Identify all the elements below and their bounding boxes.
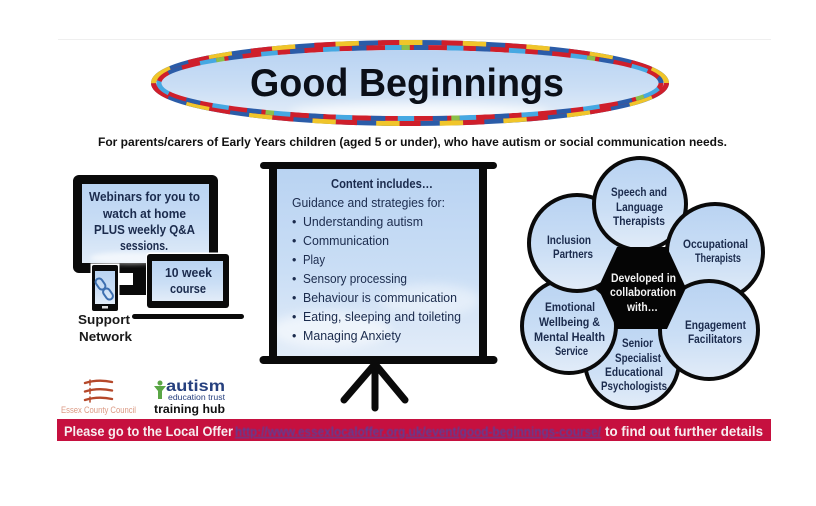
subtitle: For parents/carers of Early Years children (aged 5 or under), who have autism or social communication needs.	[98, 135, 727, 149]
centre hexagon: Developed in	[611, 273, 676, 285]
panel: content projector screen	[264, 165, 494, 408]
icon: monitor	[73, 175, 218, 295]
petal: occupational therapists: Therapists	[695, 253, 741, 265]
logo: autism education trust training hub: autism	[166, 378, 225, 395]
laptop text: 10 week	[165, 266, 212, 280]
bullet list: Play	[303, 253, 326, 267]
petal: emotional wellbeing and mental health service: Service	[555, 346, 588, 358]
petal: speech and language therapists: Speech and	[611, 187, 667, 199]
support network label: Support	[78, 312, 131, 327]
bullet list: •	[292, 310, 296, 324]
petal: occupational therapists	[667, 204, 763, 300]
centre hexagon: with…	[626, 302, 658, 314]
petal: speech and language therapists: Therapists	[613, 216, 665, 228]
footer banner: Please go to the Local Offer	[64, 424, 234, 439]
title text: Good Beginnings	[250, 62, 564, 105]
laptop text: course	[170, 282, 206, 296]
monitor text: watch at home	[102, 207, 186, 221]
petal: speech and language therapists: Language	[616, 202, 663, 214]
bullet list: •	[292, 329, 296, 343]
logo: Essex County Council: Essex County Council	[61, 405, 136, 415]
screen	[277, 169, 479, 356]
footer banner	[57, 419, 771, 441]
monitor text: Webinars for you to	[89, 190, 200, 204]
bullet list: •	[292, 272, 296, 286]
bullet list: Communication	[303, 234, 389, 248]
petal: speech and language therapists	[594, 158, 686, 250]
petal: engagement facilitators: Facilitators	[688, 334, 742, 346]
bullet list: Eating, sleeping and toileting	[303, 310, 461, 324]
monitor text: PLUS weekly Q&A	[94, 223, 195, 237]
icon: green figure	[154, 380, 166, 399]
petal: inclusion partners: Inclusion	[547, 235, 591, 247]
content text: Content includes…	[331, 177, 433, 191]
laptop text	[165, 266, 212, 296]
icon: chain link	[94, 277, 114, 301]
logo: Essex County Council	[61, 380, 136, 415]
puzzle ring border	[154, 42, 666, 124]
petal: senior specialist educational psychologists: Senior	[622, 338, 653, 350]
petal: senior specialist educational psychologists: Psychologists	[601, 381, 667, 393]
petal: emotional wellbeing and mental health service: Emotional	[545, 302, 595, 314]
petal: emotional wellbeing and mental health service	[522, 279, 616, 373]
icon: phone	[90, 264, 120, 312]
bullet list: Understanding autism	[303, 215, 423, 229]
petal: inclusion partners	[529, 195, 625, 291]
logo: autism education trust training hub	[154, 378, 226, 416]
logo: autism education trust training hub: education trust	[168, 393, 226, 402]
content text: Guidance and strategies for:	[292, 196, 445, 210]
content text	[292, 177, 461, 343]
bullet list	[292, 215, 461, 343]
centre hexagon	[598, 247, 686, 329]
bullet list: •	[292, 253, 296, 267]
panel: devices	[73, 175, 244, 344]
petal: inclusion partners: Partners	[553, 249, 593, 261]
projector frame	[264, 165, 494, 408]
bullet list: Sensory processing	[303, 272, 407, 286]
petal: engagement facilitators: Engagement	[685, 320, 746, 332]
logo: autism education trust training hub: training hub	[154, 404, 225, 416]
footer banner: to find out further details	[605, 424, 763, 439]
support network label: Network	[79, 329, 133, 344]
petal: senior specialist educational psychologists: Educational	[605, 367, 663, 379]
petal: senior specialist educational psychologists: Specialist	[615, 353, 661, 365]
bullet list: •	[292, 291, 296, 305]
support network label	[78, 312, 133, 344]
centre hexagon: collaboration	[610, 287, 676, 299]
monitor text	[89, 190, 200, 253]
monitor text: sessions.	[120, 239, 168, 253]
icon: laptop	[132, 252, 244, 319]
title banner	[154, 42, 666, 124]
petal: emotional wellbeing and mental health service: Wellbeing &	[539, 317, 600, 329]
bullet list: Managing Anxiety	[303, 329, 402, 343]
sky oval	[162, 50, 658, 116]
bullet list: Behaviour is communication	[303, 291, 457, 305]
petal: occupational therapists: Occupational	[683, 239, 748, 251]
petal: emotional wellbeing and mental health service: Mental Health	[534, 332, 605, 344]
link: http://www.essexlocaloffer.org.uk/event/good-beginnings-course/	[235, 424, 601, 439]
bullet list: •	[292, 215, 296, 229]
bullet list: •	[292, 234, 296, 248]
icon: three seaxes	[85, 380, 112, 402]
petal: engagement facilitators	[660, 281, 758, 379]
panel: collaboration flower diagram	[522, 158, 763, 408]
petal: senior specialist educational psychologists	[585, 314, 679, 408]
